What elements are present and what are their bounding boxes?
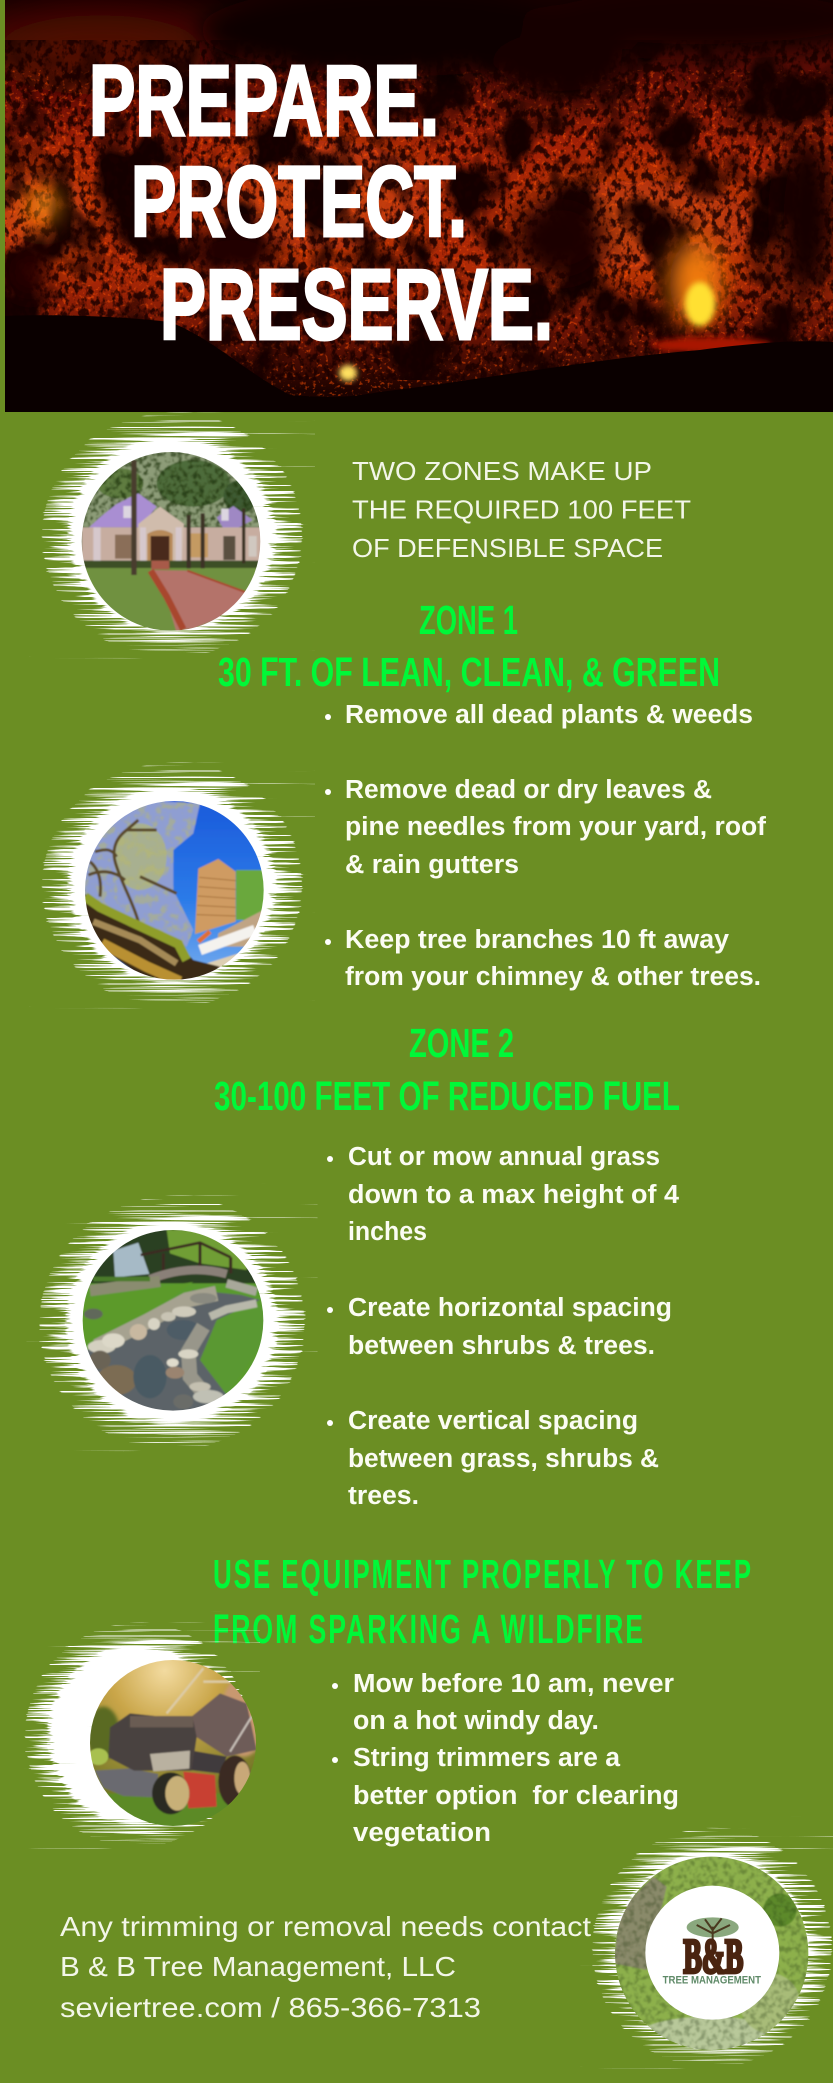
- title: PROTECT.: [131, 146, 467, 258]
- heading: zone 2: ZONE 2: [409, 1020, 514, 1066]
- zone 1 bullet list: Remove all dead plants & weeds: [345, 701, 753, 729]
- contact text: [60, 1911, 591, 2023]
- intro text: TWO ZONES MAKE UP: [352, 456, 652, 486]
- logo B and B letters: B&B: [683, 1931, 743, 1984]
- equipment bullet list: better option for clearing: [353, 1782, 679, 1810]
- equipment bullet list: vegetation: [353, 1819, 491, 1847]
- photo: lawn mower with halo: [23, 1621, 267, 1849]
- zone 2 bullet list: [327, 1143, 680, 1510]
- zone 2 bullet list: Create vertical spacing: [348, 1407, 638, 1435]
- zone 2 bullet list: down to a max height of 4: [348, 1181, 680, 1209]
- zone 1 bullet list: pine needles from your yard, roof: [345, 813, 767, 841]
- photo: house with halo: [40, 411, 304, 659]
- zone 2 bullet list: trees.: [348, 1482, 419, 1510]
- zone 1 bullet list: from your chimney & other trees.: [345, 963, 761, 991]
- heading: zone 2: [214, 1020, 680, 1119]
- equipment bullet list: Mow before 10 am, never: [353, 1670, 674, 1698]
- zone 2 bullet list: Cut or mow annual grass: [348, 1143, 660, 1171]
- contact text: seviertree.com / 865-366-7313: [60, 1992, 481, 2023]
- equipment bullet list: String trimmers are a: [353, 1744, 621, 1772]
- title: PRESERVE.: [160, 249, 553, 361]
- zone 2 bullet list: Create horizontal spacing: [348, 1294, 672, 1322]
- heading: equipment: [213, 1551, 753, 1652]
- zone 1 bullet list: & rain gutters: [345, 851, 519, 879]
- heading: zone 1: [218, 597, 720, 695]
- zone 1 bullet list: [325, 701, 767, 991]
- intro text: THE REQUIRED 100 FEET: [352, 494, 691, 524]
- intro text: [352, 456, 691, 563]
- intro text: OF DEFENSIBLE SPACE: [352, 533, 663, 563]
- zone 2 bullet list: between grass, shrubs &: [348, 1445, 659, 1473]
- logo badge with halo: [591, 1826, 833, 2070]
- zone 1 bullet list: Keep tree branches 10 ft away: [345, 926, 730, 954]
- zone 2 bullet list: between shrubs & trees.: [348, 1332, 655, 1360]
- logo caption: TREE MANAGEMENT: [663, 1975, 761, 1987]
- logo white disc: [645, 1886, 779, 2020]
- title: PREPARE.: [89, 45, 439, 157]
- zone 1 bullet list: Remove dead or dry leaves &: [345, 776, 712, 804]
- equipment bullet list: on a hot windy day.: [353, 1707, 599, 1735]
- equipment bullet list: [332, 1670, 679, 1847]
- zone 2 bullet list: inches: [348, 1218, 427, 1246]
- hero wildfire photo: [0, 0, 833, 412]
- contact text: B & B Tree Management, LLC: [60, 1951, 456, 1982]
- photo: chimney and roof with halo: [40, 761, 304, 1009]
- title: [89, 45, 553, 361]
- contact text: Any trimming or removal needs contact: [60, 1911, 591, 1942]
- photo: stone creek with halo: [37, 1194, 307, 1452]
- heading: zone 1: ZONE 1: [419, 597, 518, 643]
- logo tree icon: [687, 1917, 739, 1941]
